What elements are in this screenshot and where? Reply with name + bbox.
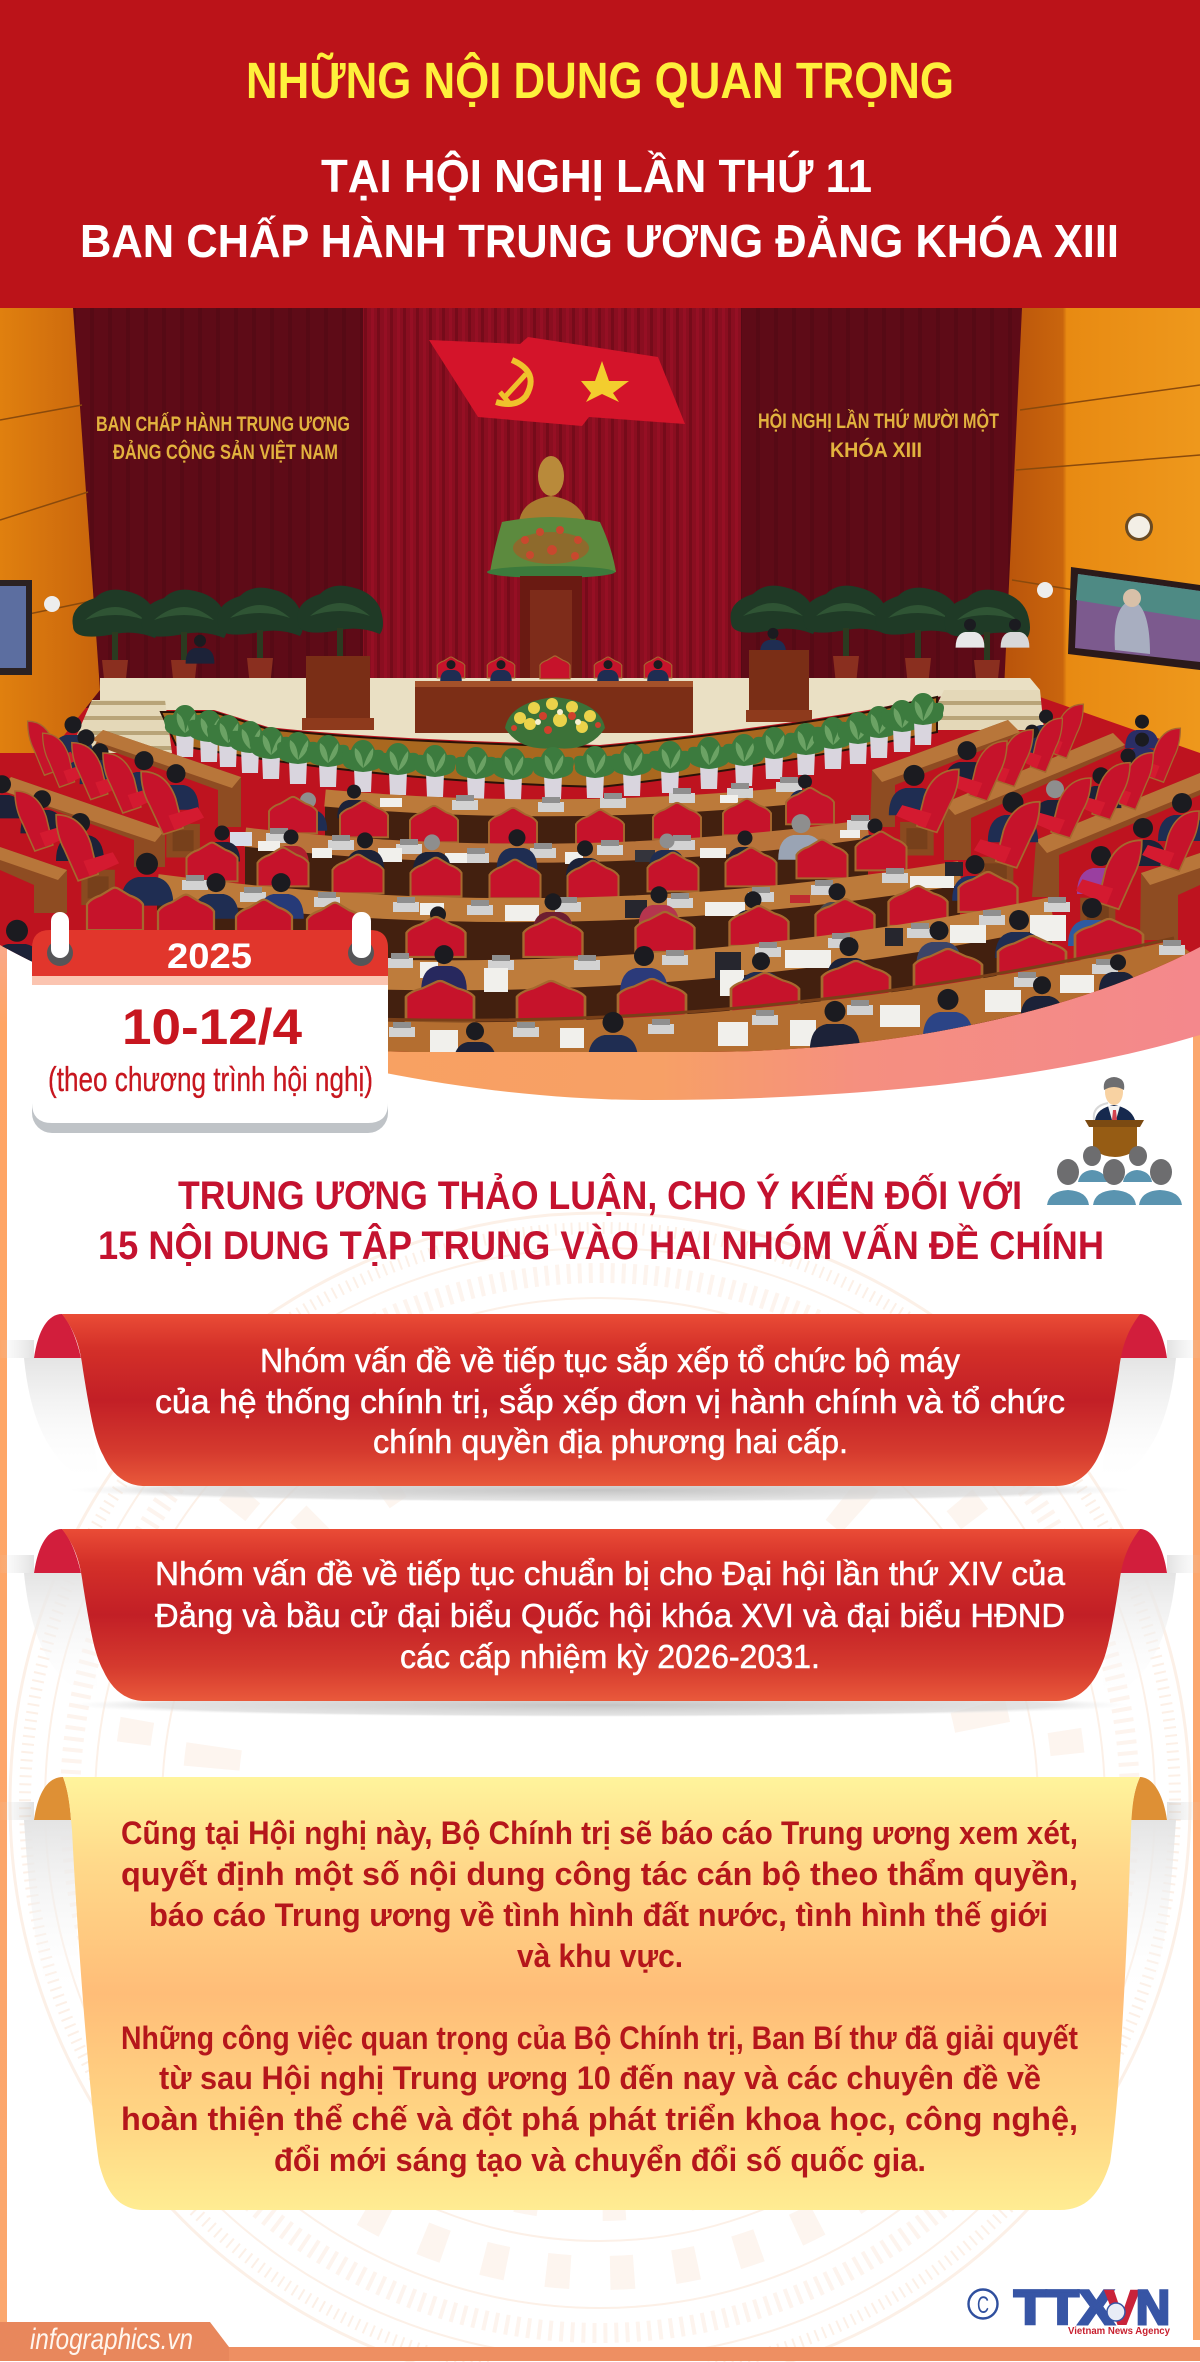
ribbon panel 1: organisational apparatus [0,1314,1200,1502]
side borders [0,940,1200,2340]
yellow panel paragraph 2: hoàn thiện thể chế và đột phá phát triển khoa học, công nghệ, [121,2101,1078,2137]
ribbon 1 text: Nhóm vấn đề về tiếp tục sắp xếp tổ chức bộ máy [260,1342,960,1379]
stage floor and steps [69,678,1044,753]
header panel [0,0,1200,308]
ribbon 2 text: Nhóm vấn đề về tiếp tục chuẩn bị cho Đại hội lần thứ XIV của [155,1555,1066,1592]
centre seating row 5 [388,936,1190,1052]
decorative band below photo [0,940,1200,1100]
centre seating row 3 [87,853,1018,965]
presidium table, chairs, lecterns, people [186,619,1029,733]
ribbon 2 text: Đảng và bầu cử đại biểu Quốc hội khóa XVI và đại biểu HĐND [155,1597,1065,1634]
section heading [98,1172,1104,1268]
yellow panel paragraph 2: từ sau Hội nghị Trung ương 10 đến nay và các chuyên đề về [159,2060,1041,2096]
ribbon 1 text: của hệ thống chính trị, sắp xếp đơn vị hành chính và tổ chức [155,1383,1065,1420]
yellow panel paragraph 1: và khu vực. [517,1938,683,1974]
ribbon 1 text [155,1342,1065,1460]
title line 1: NHỮNG NỘI DUNG QUAN TRỌNG [246,51,954,109]
centre seating row 4 [388,897,1144,1035]
ribbon 2 text: các cấp nhiệm kỳ 2026-2031. [400,1638,820,1675]
background: faint bronze drum watermark [10,1213,1190,2362]
yellow panel: further conference content [0,1777,1200,2210]
palms [72,586,1030,688]
wall lettering: KHÓA XIII [830,438,922,462]
stage front wall [161,697,937,787]
logo: TTXVN Vietnam News Agency: Vietnam News Agency [1068,2326,1170,2337]
bust and flower arrangement [487,456,616,686]
yellow panel paragraph 1: Cũng tại Hội nghị này, Bộ Chính trị sẽ báo cáo Trung ương xem xét, [121,1815,1078,1851]
title line 2: TẠI HỘI NGHỊ LẦN THỨ 11 [321,150,872,202]
calendar [32,912,388,1133]
back wall [0,308,1200,753]
logo: TTXVN Vietnam News Agency: TTX [1014,2282,1114,2335]
logo: TTXVN Vietnam News Agency: C [977,2292,989,2319]
row of potted plants [164,693,944,800]
logo: TTXVN Vietnam News Agency [968,2282,1170,2337]
wall lettering: HỘI NGHỊ LẦN THỨ MƯỜI MỘT [758,409,999,433]
ribbon 2 text [155,1555,1066,1675]
section heading: TRUNG ƯƠNG THẢO LUẬN, CHO Ý KIẾN ĐỐI VỚI [178,1172,1022,1218]
centre seating row 1 [269,775,834,850]
icon: speaker at podium with audience [1047,1077,1182,1205]
yellow panel paragraph 1 [121,1815,1078,1974]
ribbon 1 text: chính quyền địa phương hai cấp. [373,1423,848,1460]
screens, clock, cameras [0,513,1200,675]
wall lettering: BAN CHẤP HÀNH TRUNG ƯƠNG [96,413,350,436]
logo: TTXVN Vietnam News Agency: N [1136,2282,1170,2335]
yellow panel paragraph 1: báo cáo Trung ương về tình hình đất nước, tình hình thế giới [149,1897,1048,1933]
calendar date: 10-12/4 [122,999,302,1055]
yellow panel paragraph 2: Những công việc quan trọng của Bộ Chính trị, Ban Bí thư đã giải quyết [121,2020,1078,2056]
footer band with source tab [0,2322,1200,2361]
logo: TTXVN Vietnam News Agency: V [1105,2282,1139,2335]
calendar year: 2025 [167,937,252,976]
wall lettering [96,409,999,464]
ribbon panel 2: preparation for the 14th Congress [0,1529,1200,1717]
yellow panel paragraph 1: quyết định một số nội dung công tác cán bộ theo thẩm quyền, [121,1856,1078,1892]
centre seating row 2 [186,814,906,905]
right side block of delegates [870,704,1200,940]
yellow panel paragraph 2 [121,2020,1078,2178]
left side block of delegates [0,716,241,973]
section heading: 15 NỘI DUNG TẬP TRUNG VÀO HAI NHÓM VẤN ĐỀ CHÍNH [98,1222,1104,1268]
wall lettering: ĐẢNG CỘNG SẢN VIỆT NAM [113,440,338,464]
photo: Central Committee conference hall [0,308,1200,1100]
calendar note: (theo chương trình hội nghị) [48,1061,373,1099]
source text: infographics.vn [30,2323,193,2356]
flowers [505,697,605,749]
party flag [429,337,685,426]
title line 3: BAN CHẤP HÀNH TRUNG ƯƠNG ĐẢNG KHÓA XIII [80,215,1119,267]
yellow panel paragraph 2: đổi mới sáng tạo và chuyển đổi số quốc gia. [274,2142,926,2178]
